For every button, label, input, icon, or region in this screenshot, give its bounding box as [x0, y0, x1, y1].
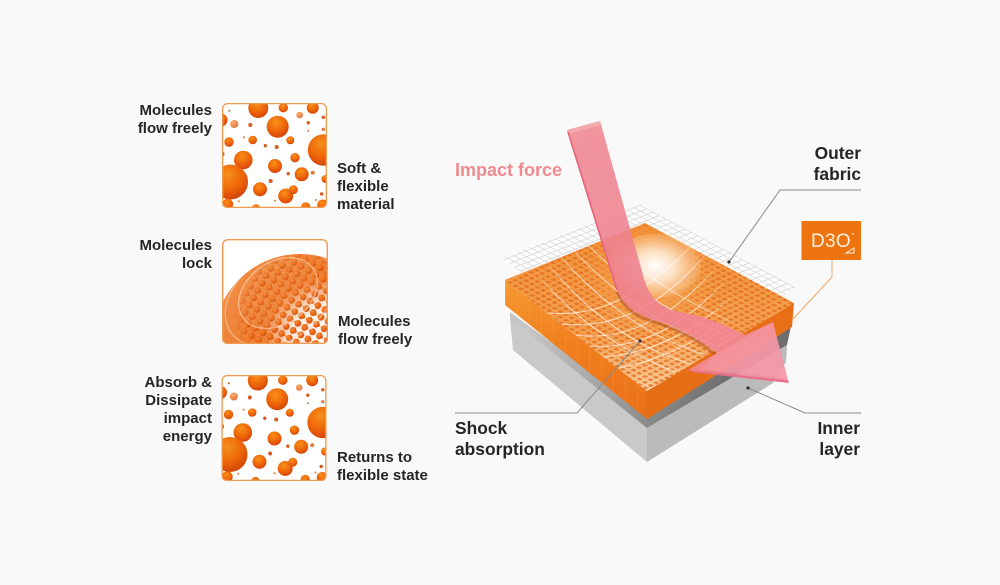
- inner layer block: [510, 312, 792, 462]
- D3O logo badge: D3O: [811, 231, 851, 252]
- panel: loose molecules: [222, 103, 327, 208]
- label: returns to flexible state: [337, 449, 428, 484]
- label: outer fabric: Outer: [815, 143, 861, 163]
- label: soft and flexible material: Soft &: [337, 160, 381, 177]
- label: absorb and dissipate impact energy: Absorb &: [144, 374, 212, 391]
- label: outer fabric: [814, 143, 861, 184]
- label: returns to flexible state: flexible state: [337, 467, 428, 484]
- label: returns to flexible state: Returns to: [337, 449, 412, 466]
- panel: molecules return to flexible state: [222, 375, 326, 481]
- leader line: shock absorption: [455, 339, 642, 413]
- label: inner layer: layer: [819, 439, 860, 459]
- label: inner layer: [817, 418, 860, 459]
- label: molecules flow freely (top): [138, 102, 213, 137]
- label: molecules lock: [139, 237, 213, 272]
- shock absorbing orange layer: [505, 223, 794, 419]
- label: molecules flow freely (top): Molecules: [139, 102, 212, 119]
- label: molecules lock: lock: [182, 255, 213, 272]
- impact force arrow: [567, 121, 789, 383]
- label: absorb and dissipate impact energy: [144, 374, 213, 445]
- label: soft and flexible material: [337, 160, 395, 213]
- label: molecules lock: Molecules: [139, 237, 212, 254]
- label: impact force: Impact force: [455, 160, 562, 180]
- label: soft and flexible material: material: [337, 196, 395, 213]
- leader line: D3O: [793, 260, 832, 319]
- leader line: inner layer: [746, 386, 861, 413]
- label: soft and flexible material: flexible: [337, 178, 389, 195]
- label: molecules flow freely (top): flow freely: [138, 120, 213, 137]
- label: absorb and dissipate impact energy: energy: [163, 428, 213, 445]
- label: molecules flow freely (middle): Molecules: [338, 313, 411, 330]
- leader line: outer fabric: [727, 190, 861, 264]
- panel: locked molecules under impact: [222, 239, 328, 344]
- label: molecules flow freely (middle): [338, 313, 413, 348]
- D3O logo badge: [802, 221, 861, 260]
- label: absorb and dissipate impact energy: Dissipate: [145, 392, 212, 409]
- label: outer fabric: fabric: [814, 164, 861, 184]
- outer fabric mesh: [501, 205, 797, 360]
- label: shock absorption: absorption: [455, 439, 545, 459]
- label: shock absorption: Shock: [455, 418, 508, 438]
- layered material diagram: [501, 121, 797, 462]
- warped white grid: [534, 240, 738, 372]
- label: absorb and dissipate impact energy: impact: [164, 410, 212, 427]
- label: molecules flow freely (middle): flow freely: [338, 331, 413, 348]
- label: shock absorption: [455, 418, 545, 459]
- label: inner layer: Inner: [817, 418, 860, 438]
